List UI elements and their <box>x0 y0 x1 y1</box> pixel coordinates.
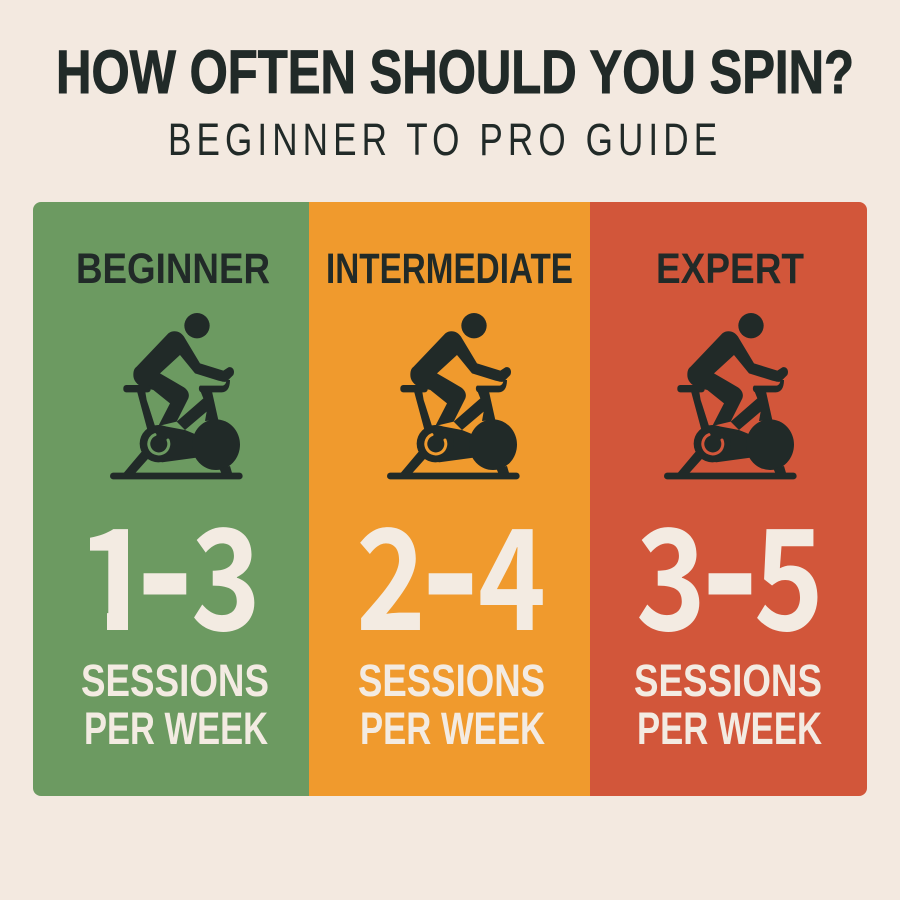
subtitle: BEGINNER TO PRO GUIDE <box>168 114 717 165</box>
text: sessions per week <box>358 655 545 754</box>
number: 3-5: 3 <box>636 469 706 671</box>
text: sessions per week: PER WEEK <box>360 703 545 754</box>
number: 1-3: 3 <box>191 469 261 671</box>
heading: beginner: BEGINNER <box>76 245 270 293</box>
panel: expert <box>590 202 867 796</box>
number: 2-4: 2 <box>356 469 426 671</box>
number: 3-5 <box>636 469 824 671</box>
number: 2-4: 4 <box>478 469 546 671</box>
number: 1-3: 1 <box>76 469 156 671</box>
heading: intermediate: INTERMEDIATE <box>326 245 573 293</box>
text: sessions per week: PER WEEK <box>637 703 822 754</box>
number: 1-3 <box>90 527 254 632</box>
icon: spin bike rider <box>664 313 797 479</box>
text: sessions per week: SESSIONS <box>358 655 545 706</box>
panel: intermediate <box>309 202 590 796</box>
number: 1-3: - <box>137 469 193 668</box>
icon: spin bike rider <box>110 313 243 479</box>
number: 2-4 <box>356 469 546 671</box>
panel: beginner <box>33 202 309 796</box>
number: 3-5: - <box>702 469 758 668</box>
number: 2-4: - <box>422 469 479 668</box>
text: sessions per week <box>634 655 822 754</box>
text: sessions per week: PER WEEK <box>84 703 268 754</box>
heading: expert: EXPERT <box>656 245 804 293</box>
text: sessions per week: SESSIONS <box>634 655 822 706</box>
text: sessions per week <box>81 655 269 754</box>
text: sessions per week: SESSIONS <box>81 655 269 706</box>
number: 3-5: 5 <box>754 469 824 671</box>
icon: spin bike rider <box>387 313 520 479</box>
